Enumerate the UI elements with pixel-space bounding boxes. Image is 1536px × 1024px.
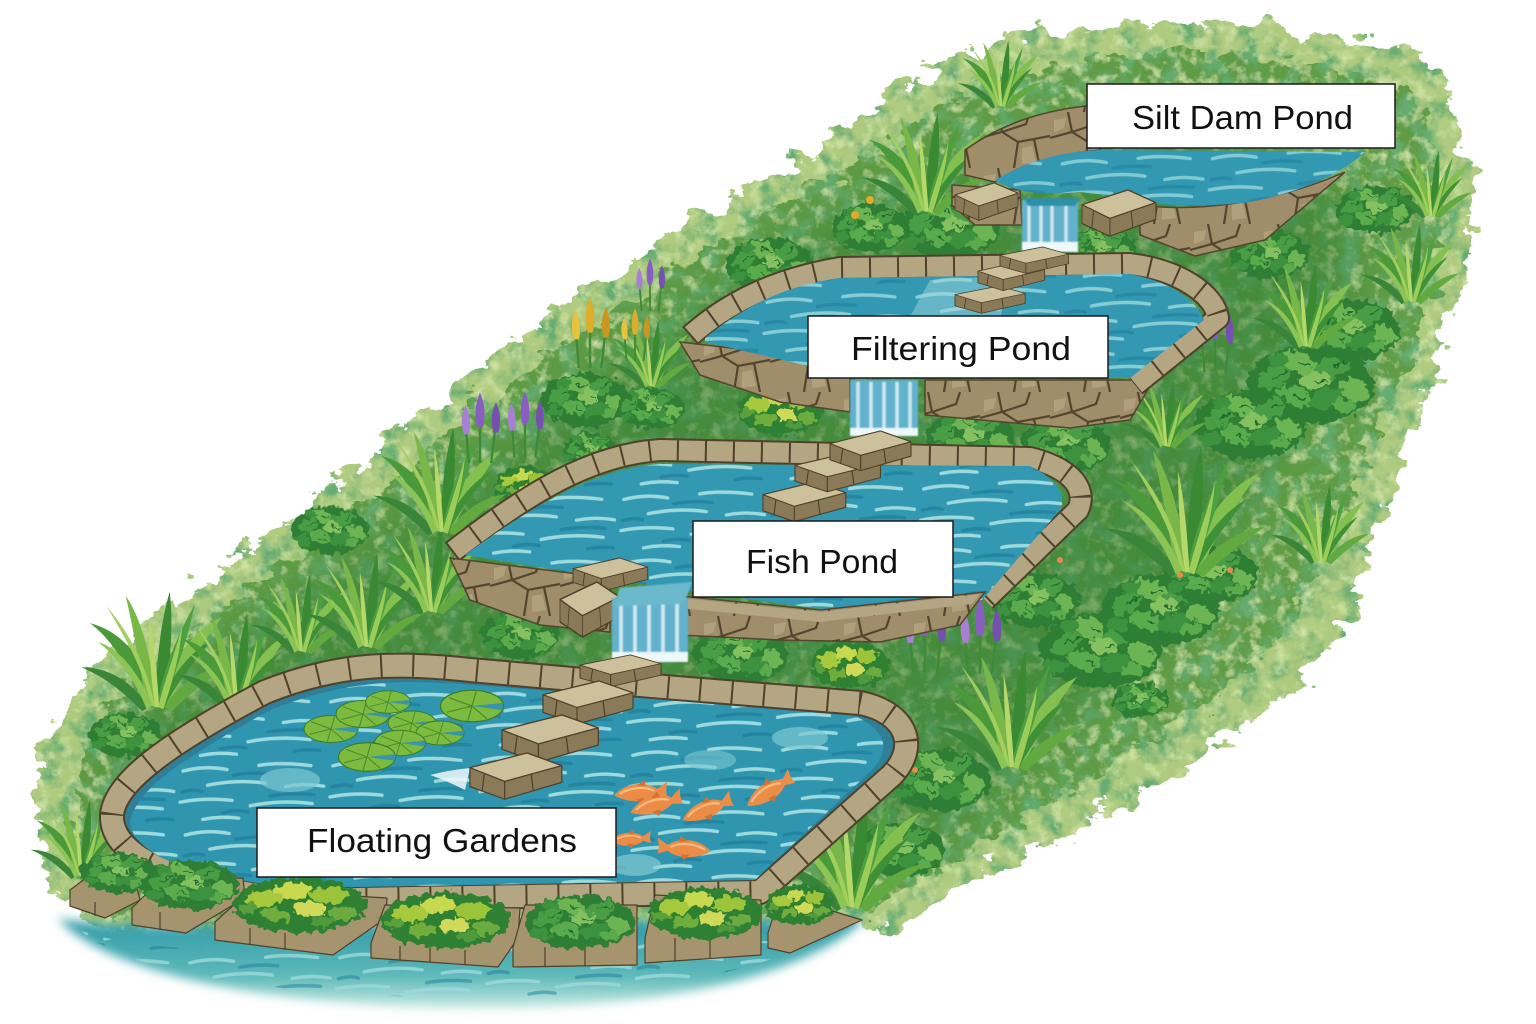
stepping stones <box>955 286 1025 313</box>
retaining stones <box>965 105 1100 182</box>
label: Silt Dam Pond: Silt Dam Pond <box>1132 99 1353 136</box>
lily pads <box>304 690 504 771</box>
water <box>465 464 1062 610</box>
wall <box>680 342 1165 428</box>
planter foliage <box>80 853 834 949</box>
pond: silt dam <box>952 105 1365 256</box>
stepping stones: lower pond <box>470 655 661 799</box>
label: Floating Gardens: Floating Gardens <box>307 822 577 859</box>
water <box>130 682 883 888</box>
rim <box>112 665 906 900</box>
water <box>995 150 1365 205</box>
label: Filtering Pond <box>808 316 1108 378</box>
pond: filtering <box>680 247 1218 428</box>
waterfall: middle <box>850 380 918 436</box>
stone block <box>1082 190 1156 236</box>
waterfall: lower <box>612 582 692 662</box>
label: Silt Dam Pond <box>1087 84 1395 148</box>
label: Fish Pond <box>693 521 953 597</box>
stepping stones <box>763 482 846 522</box>
label: Floating Gardens <box>257 808 616 877</box>
planter bases <box>70 875 862 967</box>
wall <box>450 558 985 642</box>
rim <box>690 264 1218 385</box>
shrubs on the hillside <box>89 186 1414 877</box>
pond: fish <box>450 431 1081 642</box>
rim <box>452 450 1081 600</box>
water highlights <box>260 768 320 792</box>
waterfall: upper <box>1022 198 1080 252</box>
bottom water channel <box>58 918 865 1008</box>
grasses and flowers on the hillside <box>31 40 1472 912</box>
pond: floating gardens <box>112 665 906 900</box>
label: Filtering Pond: Filtering Pond <box>851 330 1071 367</box>
koi fish <box>610 768 799 861</box>
label: Fish Pond: Fish Pond <box>746 543 898 580</box>
floating garden planters <box>70 853 862 967</box>
lower wall <box>952 172 1345 256</box>
water <box>705 274 1204 378</box>
